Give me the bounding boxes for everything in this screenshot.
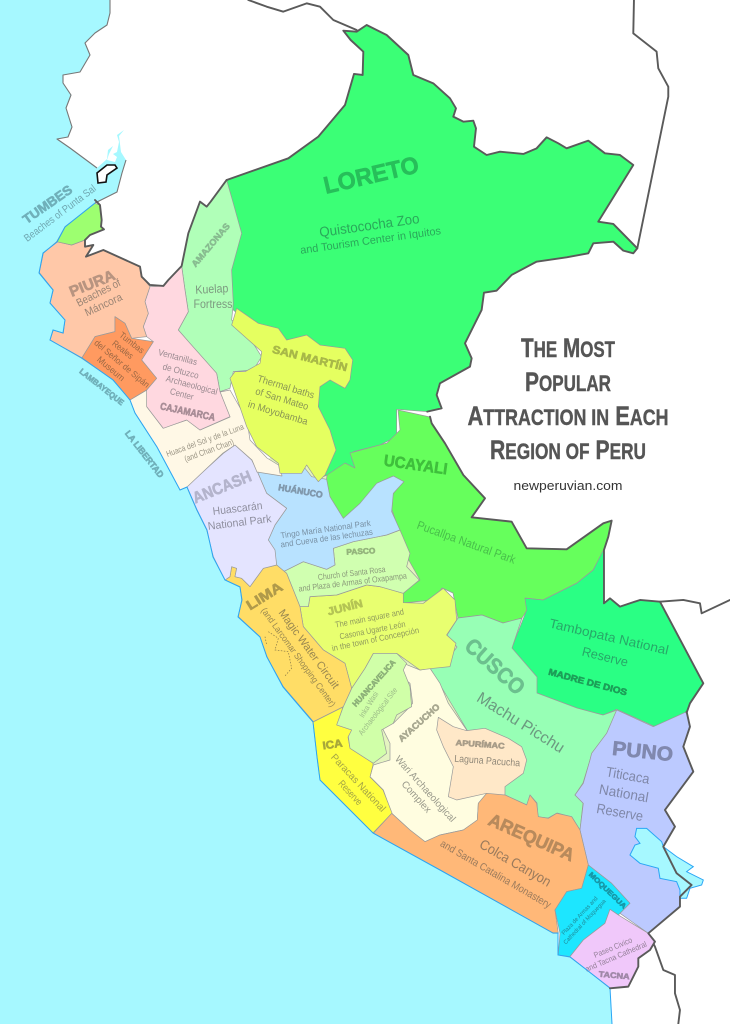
region: Huancavelica: [337, 653, 412, 763]
label: Piura: Máncora: [83, 291, 125, 319]
title: REGION OF PERU: [490, 435, 646, 465]
label: Puno: [595, 738, 674, 824]
Peru coastline: [39, 203, 612, 1024]
region: Ucayali: [325, 410, 612, 623]
label: Pasco: and Plaza de Armas of Oxapampa: [298, 570, 408, 594]
label: Junín: [326, 597, 420, 653]
label: Lima: [243, 578, 341, 709]
label: Lima: LIMA: [243, 578, 286, 613]
island outline in the gulf: [97, 165, 117, 183]
label: Amazonas: Kuelap: [195, 281, 229, 297]
label: Piura: PIURA: [67, 267, 118, 301]
label: Huancavelica: HUANCAVELICA: [351, 658, 398, 709]
region: Loreto: [223, 25, 637, 477]
label: Apurímac: [454, 738, 521, 769]
Lima city dotted outline: [265, 632, 292, 676]
region: Madre de Dios: [512, 550, 703, 727]
label: Loreto: [299, 152, 442, 257]
label: Pasco: Church of Santa Rosa: [317, 564, 386, 582]
label: La Libertad text: (and Chan Chan): [183, 437, 235, 464]
label: Lambayeque attraction: Museum: [95, 354, 127, 383]
label: San Martín: Thermal baths: [256, 374, 316, 401]
label: Moquegua: Plaza de Armas and: [561, 896, 600, 937]
label: Lambayeque attraction: del Señor de Sipán: [92, 338, 152, 390]
region: Junín: [300, 585, 457, 688]
region: Ayacucho: [370, 663, 487, 842]
label: Pasco: [298, 546, 408, 594]
region: Lima: [225, 565, 352, 722]
label: Pasco: PASCO: [346, 546, 376, 557]
label: Madre de Dios: Reserve: [580, 644, 630, 670]
title: POPULAR: [525, 367, 611, 397]
label: San Martín: in Moyobamba: [246, 399, 309, 428]
label: San Martín: of San Mateo: [254, 386, 310, 413]
label: Ancash: [190, 468, 273, 533]
label: Puno: Titicaca: [605, 763, 651, 787]
region: Pasco: [283, 530, 419, 607]
label: Ica: Paracas National: [328, 752, 387, 814]
label: Ayacucho: [392, 702, 457, 825]
region: Apurímac: [437, 717, 527, 800]
label: Cajamarca: CAJAMARCA: [159, 401, 216, 424]
label: Huánuco: [277, 482, 373, 549]
label: Puno: National: [598, 781, 650, 805]
label: Ancash: ANCASH: [190, 468, 254, 507]
label: San Martín: [246, 343, 349, 428]
label: Junín: in the town of Concepción: [331, 625, 420, 653]
label: Apurímac: APURÍMAC: [455, 738, 505, 751]
label: La Libertad (on sea): LA LIBERTAD: [123, 429, 166, 480]
label: Cajamarca: Center: [169, 386, 195, 402]
region: Ancash: [187, 445, 287, 587]
label: Apurímac: Laguna Pacucha: [454, 754, 521, 769]
website credit: newperuvian.com: [514, 478, 622, 493]
label: Loreto: Quistococha Zoo: [318, 210, 421, 240]
label: Arequipa: Colca Canyon: [477, 836, 554, 890]
Ecuador coastline: [57, 0, 110, 168]
region: La Libertad: [130, 390, 282, 490]
region: Piura: [39, 240, 150, 358]
label: Amazonas: Fortress: [194, 297, 232, 311]
label: Puno: Reserve: [595, 800, 645, 824]
label: Cajamarca: Ventanillas: [157, 347, 199, 367]
region: Lambayeque: [82, 317, 157, 400]
label: La Libertad text: Huaca del Sol y de la Luna: [165, 421, 245, 459]
label: Lambayeque attraction: Tumbas: [117, 330, 147, 356]
label: La Libertad text: [165, 421, 245, 464]
label: Ucayali: Pucallpa Natural Park: [415, 518, 518, 567]
label: Piura: [67, 267, 125, 319]
label: Ica: Reserve: [336, 779, 364, 808]
region: Cusco: [430, 615, 617, 830]
title: ATTRACTION IN EACH: [468, 401, 669, 431]
label: Arequipa: and Santa Catalina Monastery: [438, 838, 554, 911]
label: San Martín: SAN MARTÍN: [271, 343, 349, 374]
label: Ancash: National Park: [207, 513, 273, 533]
label: Amazonas: AMAZONAS: [190, 221, 232, 269]
label: Lima: Magic Water Circuit: [276, 607, 341, 691]
label: Cajamarca: de Otuzco: [162, 361, 200, 381]
label: Madre de Dios: [547, 616, 670, 697]
lake Titicaca: [630, 828, 703, 898]
title: THE MOST: [521, 333, 615, 363]
label: Junín: Casona Ugarte León: [339, 619, 406, 641]
label: Lambayeque (on sea): LAMBAYEQUE: [77, 367, 126, 408]
region: Ica: [313, 707, 392, 833]
label: Madre de Dios: Tambopata National: [548, 616, 670, 658]
region: Puno: [575, 710, 693, 933]
label: Cusco: Machu Picchu: [473, 689, 567, 757]
label: Arequipa: [438, 810, 578, 911]
label: Lambayeque attraction: Reales: [110, 338, 136, 361]
label: Huancavelica: Inka Wasi: [357, 690, 380, 719]
region: San Martín: [230, 308, 353, 482]
label: Ica: ICA: [322, 738, 343, 752]
label: Tumbes (on sea): TUMBES: [20, 182, 75, 227]
region: Tacna: [570, 909, 655, 988]
label: Huancavelica: [351, 658, 400, 737]
label: Ayacucho: AYACUCHO: [396, 702, 442, 744]
label: Madre de Dios: MADRE DE DIOS: [547, 667, 628, 697]
label: Ucayali: [383, 453, 518, 567]
label: Tumbes (on sea): Beaches of Punta Sal: [22, 183, 99, 245]
label: Huánuco: Tingo María National Park: [280, 518, 372, 540]
label: Huánuco: and Cueva de las lechuzas: [280, 527, 373, 549]
label: Ayacucho: Complex: [399, 779, 433, 815]
label: Amazonas: [190, 221, 232, 311]
label: Cusco: [460, 633, 567, 757]
label: Moquegua: MOQUEGUA: [587, 871, 627, 910]
label: Cusco: CUSCO: [460, 633, 530, 700]
label: Moquegua: Cathedral of Moquegua: [563, 898, 608, 946]
neighbouring country borders: [248, 0, 730, 1024]
label: Puno: PUNO: [611, 738, 674, 766]
label: Ayacucho: Wari Archaeological: [392, 754, 457, 825]
label: Cajamarca: Archaeological: [165, 373, 219, 397]
label: Loreto: and Tourism Center in Iquitos: [299, 225, 442, 257]
region: Cajamarca: [142, 266, 230, 430]
region: Moquegua: [555, 865, 630, 957]
label: Huancavelica: Archaeological Site: [357, 685, 400, 737]
label: Tacna: TACNA: [598, 970, 630, 981]
gulf shoreline: [95, 160, 126, 203]
region: Arequipa: [373, 793, 588, 933]
Peru land border: [85, 25, 703, 988]
label: Lima: (and Larcomar Shopping Center): [259, 606, 338, 709]
label: Junín: The main square and: [334, 606, 405, 630]
label: Junín: JUNÍN: [326, 597, 364, 618]
label: Huánuco: HUÁNUCO: [277, 482, 324, 500]
label: Loreto: LORETO: [321, 152, 422, 200]
label: Tacna: and Tacna Cathedral: [584, 940, 648, 974]
region: Huánuco: [257, 468, 404, 572]
region: Amazonas: [178, 180, 262, 392]
label: Piura: Beaches of: [75, 277, 123, 310]
label: Cajamarca: [157, 347, 219, 424]
label: Tacna: Paseo Civico: [592, 935, 634, 960]
label: Ucayali: UCAYALI: [383, 453, 448, 478]
label: Arequipa: AREQUIPA: [485, 810, 578, 865]
region: Tumbes: [57, 203, 104, 245]
label: Moquegua: [561, 871, 627, 946]
label: Ancash: Huascarán: [212, 500, 263, 518]
title: [468, 333, 669, 465]
